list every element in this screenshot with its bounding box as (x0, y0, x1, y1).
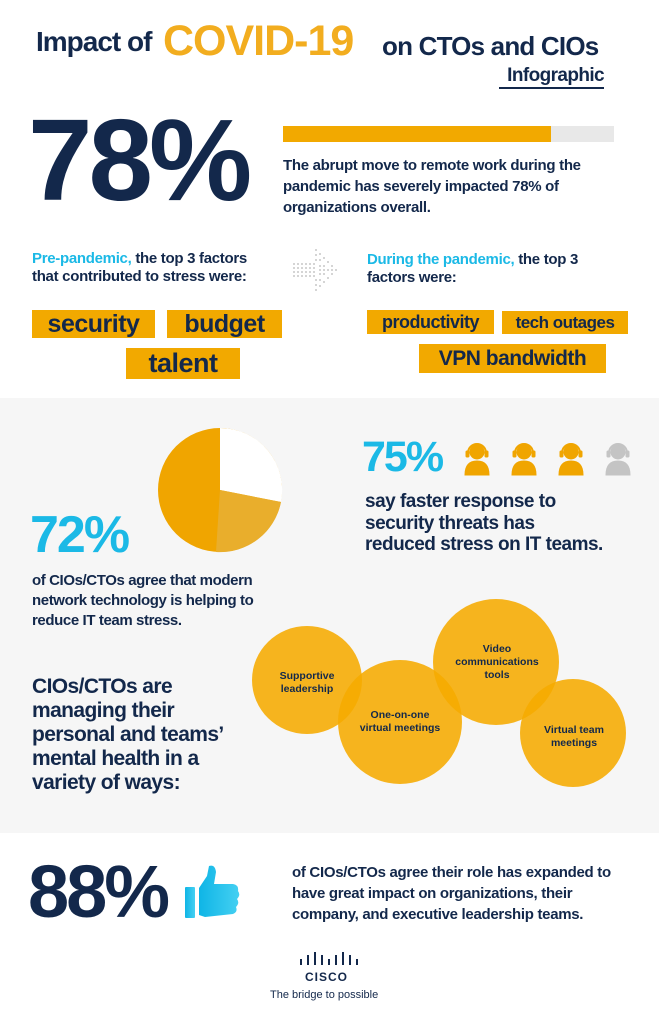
stat 75%: 75% (362, 433, 442, 481)
text: remote work impact: organizations overall. (283, 199, 431, 216)
title: COVID-19 (163, 17, 353, 65)
pie chart 72% (158, 428, 282, 552)
logo: cisco: The bridge to possible (270, 989, 378, 1001)
bubbles: ways (252, 599, 626, 787)
bubbles: ways: tools (484, 669, 510, 681)
text: managing mental health: personal and teams’ (32, 723, 224, 746)
text: role expanded: company, and executive leadership teams. (292, 906, 583, 923)
tag: talent (126, 348, 240, 379)
bubbles: ways: One-on-one (371, 709, 430, 721)
text: role expanded: of CIOs/CTOs agree their role has expanded to (292, 864, 611, 881)
text: modern network (32, 572, 254, 629)
icon: thumbs up (185, 866, 240, 918)
bubbles: ways: leadership (281, 683, 333, 695)
text: pre-pandemic (32, 250, 247, 285)
bubbles: ways: Video (483, 643, 511, 655)
text: pre-pandemic: Pre-pandemic, the top 3 factors (32, 250, 247, 267)
text: during pandemic: factors were: (367, 269, 456, 286)
text: faster response: reduced stress on IT teams. (365, 534, 603, 555)
stat 72%: 72% (30, 506, 128, 564)
text: during pandemic (367, 251, 578, 286)
title: on CTOs and CIOs (382, 31, 598, 61)
title (36, 17, 598, 65)
bubbles: ways: communications (455, 656, 539, 668)
tag: budget: budget (184, 310, 265, 338)
subtitle: Infographic: Infographic (507, 65, 604, 86)
text: managing mental health: CIOs/CTOs are (32, 675, 172, 698)
text: managing mental health (32, 675, 224, 794)
tag: productivity (367, 310, 494, 334)
logo: cisco (270, 952, 378, 1001)
text: remote work impact: pandemic has severely impacted 78% of (283, 178, 559, 195)
text: managing mental health: mental health in a (32, 747, 199, 770)
logo: cisco: CISCO (305, 970, 348, 984)
icons: headset people (464, 443, 630, 476)
text: modern network: of CIOs/CTOs agree that modern (32, 572, 252, 589)
tag: VPN bandwidth: VPN bandwidth (439, 346, 586, 370)
text: faster response: say faster response to (365, 491, 556, 512)
text: role expanded (292, 864, 611, 923)
big stat 78%: 78% (28, 95, 248, 225)
text: managing mental health: managing their (32, 699, 174, 722)
text: faster response: security threats has (365, 512, 535, 534)
text: modern network: reduce IT team stress. (32, 612, 182, 629)
bubbles: ways: Supportive (280, 670, 335, 682)
progress bar 78% (283, 126, 614, 142)
text: role expanded: have great impact on organizations, their (292, 885, 572, 902)
text: modern network: network technology is helping to (32, 592, 253, 609)
tag: tech outages: tech outages (516, 312, 614, 332)
text: remote work impact: The abrupt move to remote work during the (283, 157, 581, 174)
tag: talent: talent (148, 348, 218, 378)
tag: VPN bandwidth (419, 344, 606, 373)
stat 88%: 88% (28, 850, 167, 933)
arrow: dotted (293, 249, 337, 291)
bubbles: ways: Virtual team (544, 724, 604, 736)
bubbles: ways: meetings (551, 737, 597, 749)
tag: budget (167, 310, 282, 338)
text: during pandemic: During the pandemic, the top 3 (367, 251, 578, 268)
title: Impact of (36, 26, 151, 57)
tag: security: security (48, 310, 139, 338)
text: pre-pandemic: that contributed to stress were: (32, 268, 247, 285)
bubbles: ways: virtual meetings (360, 722, 440, 734)
tag: productivity: productivity (382, 312, 479, 332)
tag: tech outages (502, 311, 628, 334)
text: faster response (365, 491, 603, 555)
text: managing mental health: variety of ways: (32, 771, 180, 794)
panel: gray section (0, 398, 659, 833)
text: remote work impact (283, 157, 581, 216)
